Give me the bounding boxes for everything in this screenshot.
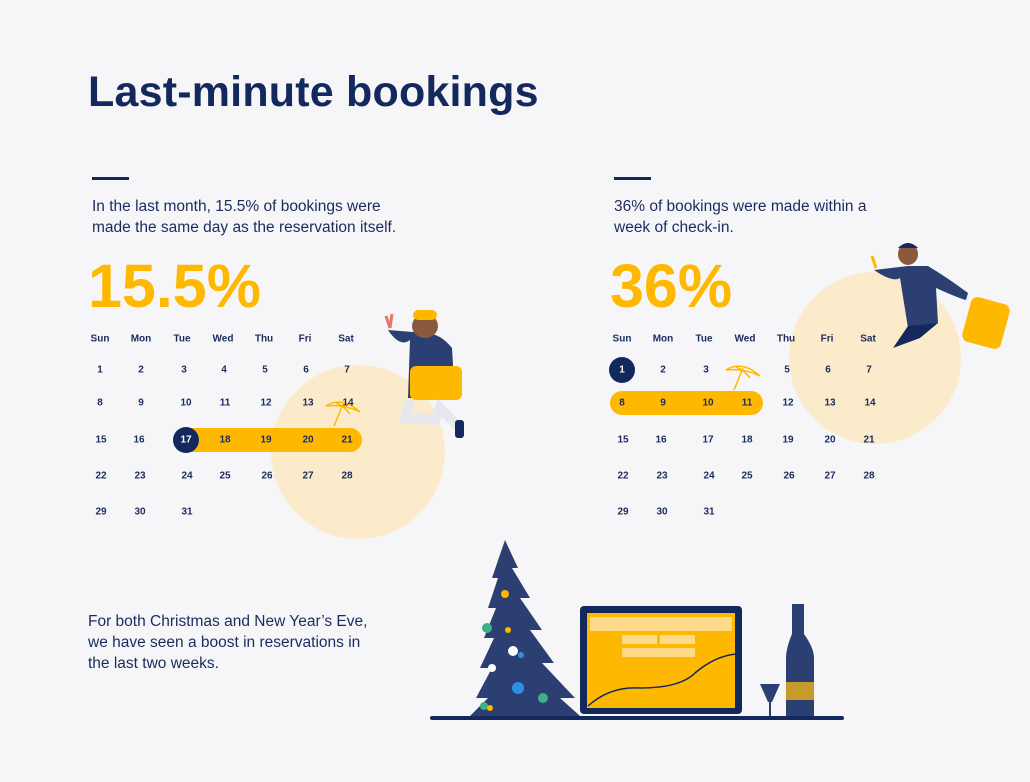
calendar right: 23 (656, 470, 668, 482)
calendar right: 18 (741, 434, 753, 446)
text: same-day stat: In the last month, 15.5% of bookings were made the same day as the reservation itself. (92, 198, 396, 236)
calendar left: 2 (138, 364, 144, 376)
icon: jumping traveller right (870, 243, 1010, 349)
title: Last-minute bookings (88, 68, 539, 116)
calendar right: 10 (702, 398, 714, 408)
icon: laptop with growth chart (580, 606, 742, 714)
calendar left: 23 (134, 470, 146, 482)
calendar right: Sun (613, 334, 631, 344)
calendar left: 21 (341, 434, 353, 446)
icon: jumping traveller left (384, 310, 464, 438)
calendar left: 20 (302, 434, 314, 446)
calendar left: 1 (97, 364, 103, 376)
calendar left: 30 (134, 506, 146, 518)
calendar left: 3 (181, 364, 187, 376)
calendar right: 13 (824, 398, 836, 408)
calendar right: 29 (617, 506, 629, 518)
panel: week-before bookings (610, 177, 866, 320)
calendar left: 6 (303, 364, 309, 376)
calendar right: Thu (777, 334, 795, 344)
range bar right (610, 391, 763, 415)
big number 36%: 36% (610, 252, 732, 320)
calendar left: 15 (95, 434, 107, 446)
circle: beige right (789, 272, 961, 444)
calendar left: 4 (221, 364, 227, 376)
calendar right: 27 (824, 470, 836, 482)
calendar right: Mon (653, 334, 673, 344)
calendar right: 24 (703, 470, 715, 482)
text: holiday boost: For both Christmas and New Year’s Eve, we have seen a boost in reservations in the last two weeks. (88, 613, 367, 672)
icon: umbrella right (726, 365, 760, 390)
calendar right (612, 334, 876, 518)
icon: umbrella left (326, 401, 360, 426)
calendar left: 9 (138, 398, 144, 408)
shelf line (430, 716, 844, 720)
calendar left (90, 334, 354, 518)
illustration: tree, laptop, bottle (430, 540, 844, 720)
calendar left: 10 (180, 398, 192, 408)
calendar left: 19 (260, 434, 272, 446)
divider dash left (92, 177, 129, 180)
range bar left (174, 428, 362, 452)
big number 15.5%: 15.5% (88, 252, 261, 320)
calendar right: 9 (660, 398, 666, 408)
calendar left: 14 (342, 398, 354, 408)
calendar left: 27 (302, 470, 314, 482)
calendar right: 31 (703, 506, 715, 518)
calendar right: 22 (617, 470, 629, 482)
calendar left: 26 (261, 470, 273, 482)
calendar right: Tue (695, 334, 713, 344)
calendar left: 31 (181, 506, 193, 518)
calendar left: 12 (260, 398, 272, 408)
calendar left: 7 (344, 364, 350, 376)
calendar left: 17 (180, 434, 192, 446)
divider dash right (614, 177, 651, 180)
calendar right: Sat (860, 334, 876, 344)
calendar left: 11 (220, 398, 230, 408)
calendar right: 15 (617, 434, 629, 446)
calendar right: 1 (619, 364, 625, 376)
calendar right: 30 (656, 506, 668, 518)
calendar right: 25 (741, 470, 753, 482)
icon: wine glass (760, 684, 780, 716)
calendar right: 28 (863, 470, 875, 482)
calendar right: 17 (702, 434, 714, 446)
calendar left: 18 (219, 434, 231, 446)
calendar left: 29 (95, 506, 107, 518)
calendar right: 19 (782, 434, 794, 446)
calendar left: Sun (91, 334, 109, 344)
calendar right: 2 (660, 364, 666, 376)
calendar left: 5 (262, 364, 268, 376)
calendar right: 16 (655, 434, 667, 446)
highlight day 1 (609, 357, 635, 383)
highlight day 17 (173, 427, 199, 453)
calendar left: 22 (95, 470, 107, 482)
icon: christmas tree (470, 540, 580, 716)
calendar left: Thu (255, 334, 273, 344)
calendar right: 3 (703, 364, 709, 376)
calendar right: 6 (825, 364, 831, 376)
circle: beige left (271, 365, 445, 539)
calendar right: 12 (782, 398, 794, 408)
panel: same-day bookings (88, 177, 396, 320)
calendar left: 25 (219, 470, 231, 482)
icon: champagne bottle (786, 604, 814, 718)
text: week stat: 36% of bookings were made within a week of check-in. (614, 198, 866, 236)
calendar left: Sat (338, 334, 354, 344)
calendar right: 11 (742, 398, 752, 408)
calendar left: Wed (213, 334, 233, 344)
calendar right: 21 (863, 434, 875, 446)
calendar left: 8 (97, 398, 103, 408)
calendar left: Fri (299, 334, 311, 344)
calendar right: 20 (824, 434, 836, 446)
calendar left: 28 (341, 470, 353, 482)
calendar right: Fri (821, 334, 833, 344)
calendar left: 24 (181, 470, 193, 482)
calendar right: 14 (864, 398, 876, 408)
calendar right: 8 (619, 398, 625, 408)
calendar left: 16 (133, 434, 145, 446)
calendar right: 5 (784, 364, 790, 376)
calendar left: Mon (131, 334, 151, 344)
calendar right: 7 (866, 364, 872, 376)
calendar right: Wed (735, 334, 755, 344)
calendar left: 13 (302, 398, 314, 408)
calendar right: 26 (783, 470, 795, 482)
calendar left: Tue (173, 334, 191, 344)
